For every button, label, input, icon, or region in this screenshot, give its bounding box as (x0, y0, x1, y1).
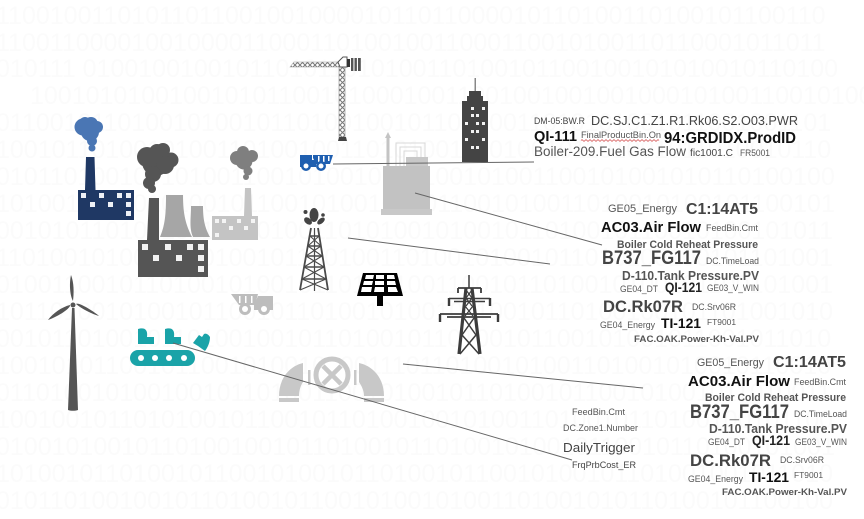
grey smoke (230, 146, 258, 180)
icon: conveyor belt (130, 328, 210, 366)
text block: lower tags: GE04_DT (708, 437, 745, 448)
background binary pattern: 0101101001001011010010110010100101001101001010110100101100100 (0, 487, 833, 515)
icon: oil derrick (300, 208, 328, 291)
background binary pattern: 1010010110100101100101001011010010110010100101101001001011010 (0, 460, 833, 488)
text block: lower tags: DC.TimeLoad (794, 409, 847, 420)
background binary pattern: 1001010100100101011001010001001100100100100100010100110010100 (30, 82, 864, 110)
text block: middle tags: FAC.OAK.Power-Kh-Val.PV (634, 334, 760, 345)
text block: conveyor tags: FeedBin.Cmt (572, 407, 625, 418)
text block: lower tags: GE04_Energy (688, 474, 743, 485)
text block: middle tags: Boiler Cold Reheat Pressure (617, 239, 758, 251)
text block: lower tags: C1:14AT5 (773, 354, 846, 371)
text block: middle tags: AC03.Air Flow (601, 219, 701, 236)
text block: lower tags: DC.Rk07R (690, 452, 771, 470)
text block: top tags: fic1001.C (690, 147, 733, 159)
text block: lower tags: Boiler Cold Reheat Pressure (705, 392, 846, 404)
text block: top tags: QI-111 (534, 128, 577, 145)
text block: middle tags: QI-121 (665, 279, 702, 295)
cooling towers (160, 195, 210, 237)
text block: middle tags: C1:14AT5 (686, 201, 758, 218)
background binary pattern: 1001011010010100110100100110101001100100101101001011010010110 (0, 136, 831, 164)
background binary pattern: 010111 0100100100101101011010100110100101100100101010010110100 (0, 55, 838, 83)
text block: middle tags: DC.Rk07R (603, 298, 683, 316)
background binary pattern: 1011010010100101100101101001010010110010110100100101101001010 (0, 298, 833, 326)
text block: lower tags: FT9001 (794, 470, 823, 480)
text block: top tags: FinalProductBin.On (581, 130, 661, 141)
background binary pattern: 1100110000100100001100011010010011000110010100110110001011011 (0, 29, 826, 57)
background binary pattern: 0010101101001011001010011010100101001011010010110010100101011 (0, 217, 833, 245)
text block: middle tags: D-110.Tank Pressure.PV (622, 269, 760, 283)
text block: middle tags: DC.TimeLoad (706, 256, 759, 267)
background binary pattern: 0100110010110100101001011010010011001011010010100101100101001 (0, 271, 833, 299)
background binary pattern: 0010110100101101001001011010010110100101100101001011001011010 (0, 325, 831, 353)
icon: blue factory (74, 117, 134, 220)
icon: pipe and valve (279, 359, 384, 402)
background binary pattern: 1010010110010100101100101001001011001010011010010100101100101 (0, 190, 835, 218)
text block: lower tags: FAC.OAK.Power-Kh-Val.PV (722, 487, 848, 498)
icon: tower crane (290, 57, 361, 141)
icon: electricity pylon (440, 275, 498, 354)
text block: middle tags: GE04_DT (620, 284, 658, 295)
background binary pattern: 1101001010010110100101100100110100101001011010100100101101001 (0, 244, 833, 272)
text block: top tags: 94:GRDIDX.ProdID (664, 130, 796, 147)
background binary pattern: 1001001011010100101100101101001001010011010010110100100101100 (0, 406, 833, 434)
text block: middle tags (600, 201, 760, 345)
text block: middle tags: FT9001 (707, 317, 736, 327)
text block: top tags: Boiler-209.Fuel Gas Flow (534, 144, 686, 159)
text block: middle tags: FeedBin.Cmt (706, 223, 758, 234)
text block: lower tags: GE05_Energy (697, 357, 764, 369)
icon: blue dump truck (300, 155, 333, 171)
text block: top tags (534, 113, 798, 159)
text block: middle tags: B737_FG117 (602, 248, 701, 269)
text block: top tags: DM-05:BW.R (534, 116, 585, 127)
icon: solar panel (357, 273, 403, 306)
text block: lower tags: GE03_V_WIN (795, 437, 847, 448)
text block: lower tags: AC03.Air Flow (688, 373, 790, 390)
text block: lower tags: B737_FG117 (690, 402, 789, 423)
background binary pattern: 0110100101001001011010011001010010110100101100101001011010011 (0, 379, 831, 407)
dark smoke (137, 143, 178, 193)
text block: lower tags: QI-121 (752, 432, 790, 448)
text block: middle tags: TI-121 (661, 315, 701, 331)
text block: middle tags: DC.Srv06R (692, 302, 736, 312)
text block: top tags: DC.SJ.C1.Z1.R1.Rk06.S2.O03.PWR (591, 113, 798, 128)
icon: grey dump truck (231, 294, 273, 315)
blue smoke (74, 117, 103, 152)
text block: middle tags: GE04_Energy (600, 320, 655, 331)
background binary pattern: 0101101001001010011001010010110100101001100101001010110100100 (0, 163, 835, 191)
text block: lower tags: DC.Srv06R (780, 455, 824, 465)
text block: lower tags: FeedBin.Cmt (794, 377, 846, 388)
text block: conveyor tags: DC.Zone1.Number (563, 423, 638, 434)
background binary pattern: 1100100110101101100100100001011011000010110100110100101100110 (0, 2, 826, 30)
text block: middle tags: GE03_V_WIN (707, 283, 759, 294)
icon: gas compressor unit (381, 132, 432, 215)
text block: conveyor tags (563, 407, 638, 471)
icon: skyscraper (462, 78, 488, 162)
text block: conveyor tags: DailyTrigger (563, 440, 636, 455)
oil spray (303, 208, 326, 226)
text block: middle tags: GE05_Energy (608, 203, 677, 215)
icon: wind turbine (48, 275, 99, 411)
text block: lower tags: TI-121 (749, 469, 789, 485)
leader lines (173, 162, 643, 460)
text block: lower tags: D-110.Tank Pressure.PV (709, 422, 848, 436)
text block: lower tags (688, 354, 848, 498)
text block: conveyor tags: FrqPrbCost_ER (572, 460, 636, 471)
background binary pattern: 1001010110010110010100101001110110100101001101001010010110010 (0, 352, 831, 380)
background binary pattern: 0110010110100101001011010010010110100011010101001011001001101 (0, 109, 831, 137)
text block: top tags: FR5001 (740, 148, 770, 159)
icon: dark factory with cooling towers (137, 143, 210, 277)
icon: light factory (212, 146, 258, 240)
background binary pattern: 0100101001011010010010110100101101001010010110010110100101001 (0, 433, 835, 461)
